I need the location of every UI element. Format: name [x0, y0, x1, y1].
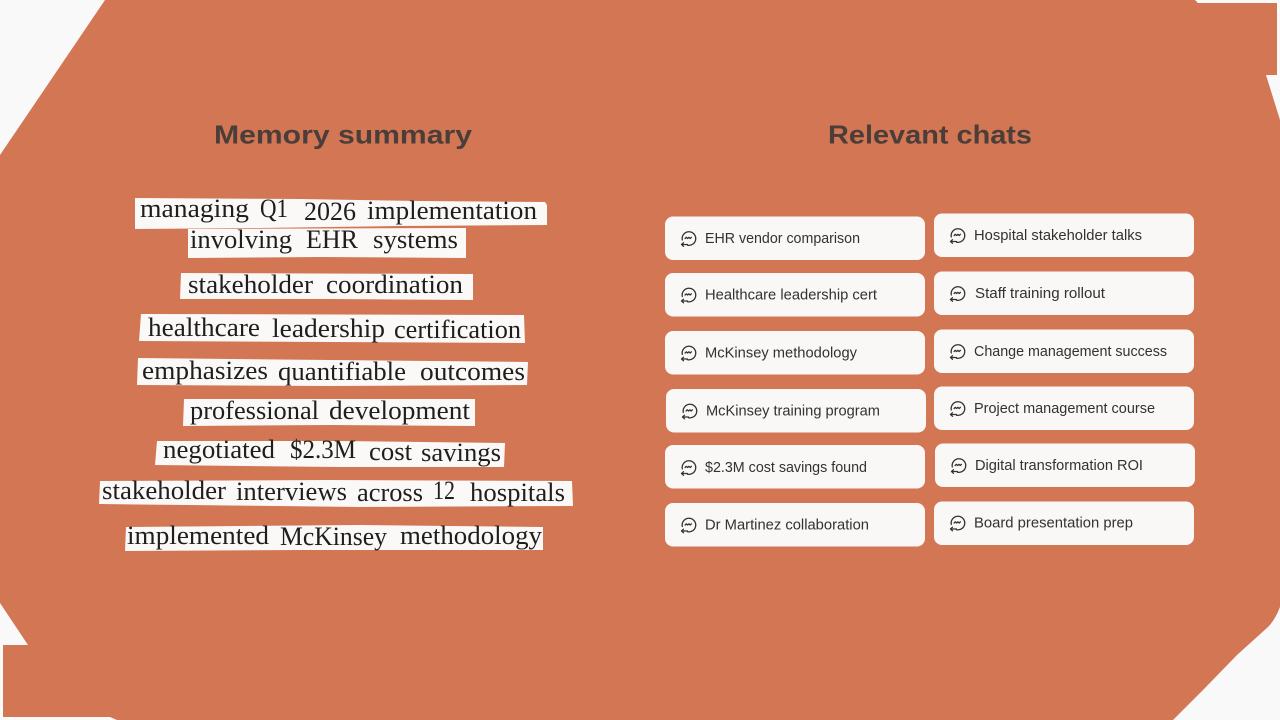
- clipping: managing Q1 2026 implementation: Q1: [260, 194, 288, 223]
- clipping: implemented McKinsey methodology: [125, 521, 543, 551]
- clipping: healthcare leadership certification: healthcare: [148, 313, 260, 342]
- clipping: healthcare leadership certification: certification: [394, 315, 521, 344]
- clipping: implemented McKinsey methodology: McKinsey: [280, 522, 387, 551]
- chat card: $2.3M cost savings found: $2.3M cost savings found: [705, 460, 867, 476]
- chat card: McKinsey training program: McKinsey training program: [706, 404, 880, 420]
- chat card: EHR vendor comparison: EHR vendor comparison: [705, 231, 860, 247]
- clipping: stakeholder interviews across 12 hospitals: interviews: [236, 477, 347, 506]
- chat card: Hospital stakeholder talks: [934, 214, 1194, 257]
- heading: relevant chats: Relevant chats: [828, 120, 1032, 150]
- chat card: Change management success: Change management success: [974, 344, 1167, 360]
- chat card: EHR vendor comparison: [665, 216, 925, 260]
- clipping: stakeholder interviews across 12 hospitals: 12: [433, 476, 455, 505]
- panel: relevant chats, left column: [665, 216, 926, 546]
- clipping: healthcare leadership certification: [139, 313, 525, 344]
- chat card: McKinsey methodology: [665, 331, 925, 374]
- chat card: Healthcare leadership cert: Healthcare leadership cert: [705, 288, 877, 304]
- chat card: Staff training rollout: Staff training rollout: [975, 286, 1105, 302]
- chat card: Project management course: Project management course: [974, 401, 1155, 417]
- clipping: professional development: professional: [190, 396, 319, 425]
- clipping: emphasizes quantifiable outcomes: emphasizes: [142, 356, 268, 385]
- clipping: negotiated $2.3M cost savings: $2.3M: [290, 435, 356, 464]
- clipping: stakeholder interviews across 12 hospitals: hospitals: [470, 478, 565, 507]
- clipping: stakeholder interviews across 12 hospitals: across: [357, 478, 423, 507]
- clipping: managing Q1 2026 implementation: managing: [140, 194, 249, 223]
- chat card: $2.3M cost savings found: [665, 445, 925, 488]
- panel: memory summary clippings: [99, 194, 573, 551]
- chat card: Board presentation prep: [934, 502, 1194, 545]
- clipping: managing Q1 2026 implementation: 2026: [304, 197, 356, 226]
- clipping: involving EHR systems: systems: [373, 225, 458, 254]
- clipping: negotiated $2.3M cost savings: negotiated: [163, 435, 275, 464]
- clipping: healthcare leadership certification: leadership: [272, 314, 385, 343]
- chat card: Dr Martinez collaboration: Dr Martinez collaboration: [705, 518, 869, 534]
- clipping: emphasizes quantifiable outcomes: quantifiable: [278, 357, 406, 386]
- clipping: professional development: [183, 396, 475, 426]
- chat card: Hospital stakeholder talks: Hospital stakeholder talks: [974, 228, 1142, 244]
- chat card: Project management course: [934, 386, 1194, 430]
- clipping: involving EHR systems: [188, 225, 466, 258]
- clipping: stakeholder interviews across 12 hospitals: stakeholder: [102, 476, 226, 505]
- clipping: implemented McKinsey methodology: implemented: [127, 521, 269, 550]
- chat card: McKinsey training program: [666, 389, 926, 432]
- clipping: negotiated $2.3M cost savings: [155, 435, 505, 467]
- chat card: Staff training rollout: [934, 272, 1194, 315]
- chat card: Digital transformation ROI: Digital transformation ROI: [975, 458, 1143, 474]
- clipping: involving EHR systems: involving: [190, 225, 292, 254]
- clipping: stakeholder coordination: [180, 270, 473, 300]
- clipping: negotiated $2.3M cost savings: savings: [421, 438, 501, 467]
- chat card: Dr Martinez collaboration: [665, 503, 925, 546]
- chat card: McKinsey methodology: McKinsey methodology: [705, 346, 858, 362]
- clipping: stakeholder coordination: coordination: [326, 270, 463, 299]
- clipping: involving EHR systems: EHR: [306, 225, 359, 254]
- clipping: stakeholder interviews across 12 hospitals: [99, 476, 573, 507]
- chat card: Board presentation prep: Board presentation prep: [974, 516, 1133, 532]
- heading: memory summary: Memory summary: [214, 120, 473, 150]
- panel: relevant chats, right column: [934, 214, 1195, 545]
- clipping: negotiated $2.3M cost savings: cost: [369, 437, 413, 466]
- clipping: managing Q1 2026 implementation: [135, 194, 547, 229]
- clipping: stakeholder coordination: stakeholder: [188, 270, 313, 299]
- clipping: emphasizes quantifiable outcomes: outcomes: [420, 357, 525, 386]
- clipping: managing Q1 2026 implementation: implementation: [367, 196, 537, 225]
- clipping: implemented McKinsey methodology: methodology: [400, 521, 542, 550]
- chat card: Healthcare leadership cert: [665, 273, 925, 316]
- clipping: professional development: development: [329, 396, 471, 425]
- chat card: Digital transformation ROI: [935, 444, 1195, 487]
- clipping: emphasizes quantifiable outcomes: [137, 356, 528, 386]
- chat card: Change management success: [934, 330, 1194, 373]
